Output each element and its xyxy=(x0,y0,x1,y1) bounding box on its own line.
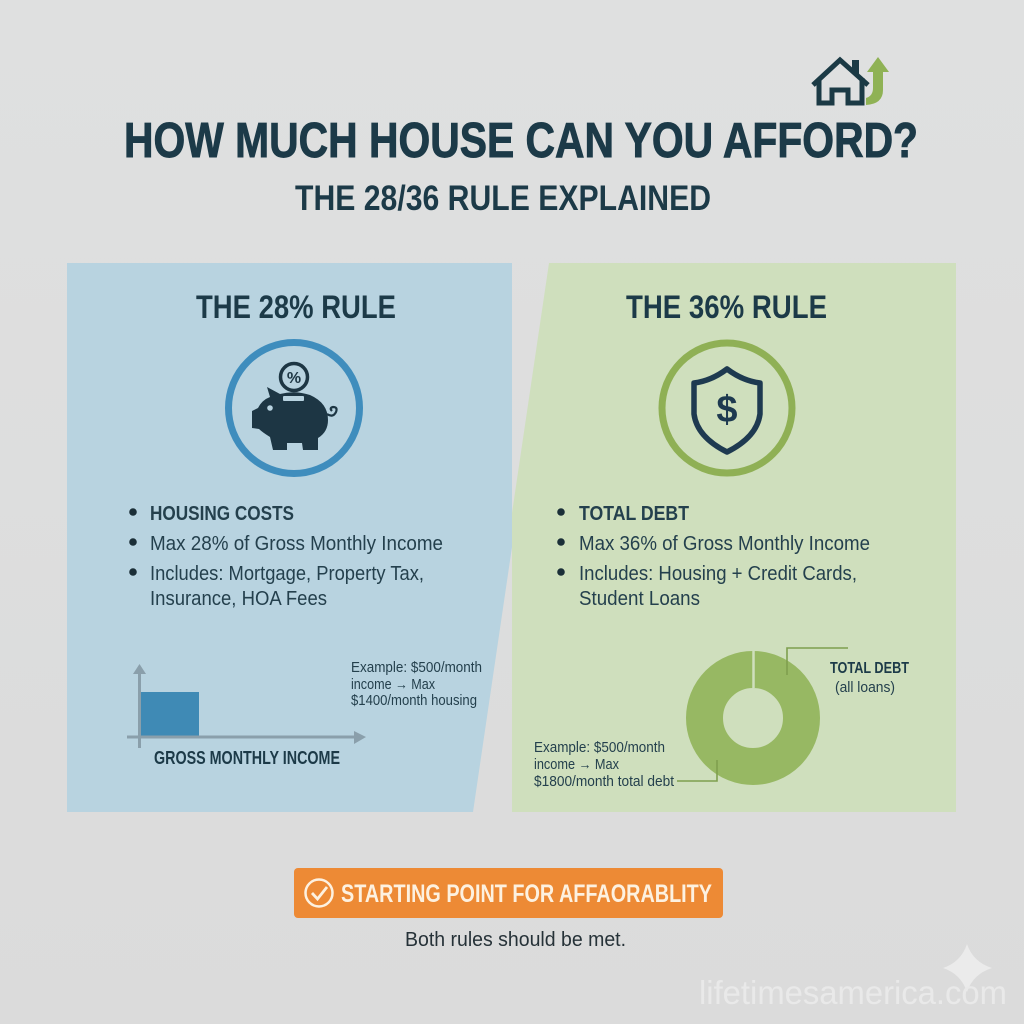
bullet list: total debt: Includes: Housing + Credit Cards, xyxy=(579,563,857,585)
watermark: lifetimesamerica.com xyxy=(699,974,1007,1011)
panel background: blue xyxy=(67,263,512,812)
donut label: total debt: (all loans) xyxy=(835,680,895,696)
example text: total debt xyxy=(534,740,674,790)
icon: piggy bank with percent coin: % xyxy=(287,370,301,387)
bullet list: total debt: Max 36% of Gross Monthly Income xyxy=(579,533,870,555)
heading: the 28% rule: THE 28% RULE xyxy=(196,289,396,325)
bullet list: total debt: TOTAL DEBT xyxy=(579,503,689,525)
caption: Both rules should be met. xyxy=(405,929,626,951)
bullet list: housing costs: Includes: Mortgage, Property Tax, xyxy=(150,563,424,585)
callout: starting point banner xyxy=(294,868,723,918)
bullet list: housing costs: Insurance, HOA Fees xyxy=(150,588,327,610)
bullet list: total debt xyxy=(557,503,870,610)
heading: the 36% rule: THE 36% RULE xyxy=(626,289,827,325)
example text: total debt: Example: $500/month xyxy=(534,740,665,756)
bar chart: gross monthly income xyxy=(127,664,366,768)
donut label: total debt xyxy=(830,660,909,696)
icon: house with up arrow xyxy=(813,57,889,105)
icon: shield with dollar sign xyxy=(662,343,792,473)
panel: 36% rule xyxy=(512,263,956,812)
panel: 28% rule xyxy=(67,263,512,812)
subtitle: THE 28/36 RULE EXPLAINED xyxy=(295,179,711,218)
icon: check mark xyxy=(306,880,332,906)
bar chart: gross monthly income: GROSS MONTHLY INCOME xyxy=(154,748,340,768)
panel background: green xyxy=(512,263,956,812)
example text: housing: income → Max xyxy=(351,677,436,693)
bullet list: housing costs: HOUSING COSTS xyxy=(150,503,294,525)
donut chart: total debt xyxy=(677,648,848,781)
icon: piggy bank with percent coin xyxy=(228,342,360,474)
bullet list: housing costs: Max 28% of Gross Monthly Income xyxy=(150,533,443,555)
example text: housing: Example: $500/month xyxy=(351,660,482,676)
bullet list: total debt: Student Loans xyxy=(579,588,700,610)
icon: shield with dollar sign: $ xyxy=(716,389,738,431)
bullet list: housing costs xyxy=(129,503,443,610)
example text: housing: $1400/month housing xyxy=(351,693,477,709)
donut label: total debt: TOTAL DEBT xyxy=(830,660,909,677)
banner text: STARTING POINT FOR AFFAORABLITY xyxy=(341,880,712,908)
example text: housing xyxy=(351,660,482,709)
watermark xyxy=(699,944,1007,1011)
example text: total debt: $1800/month total debt xyxy=(534,774,674,790)
example text: total debt: income → Max xyxy=(534,757,620,773)
